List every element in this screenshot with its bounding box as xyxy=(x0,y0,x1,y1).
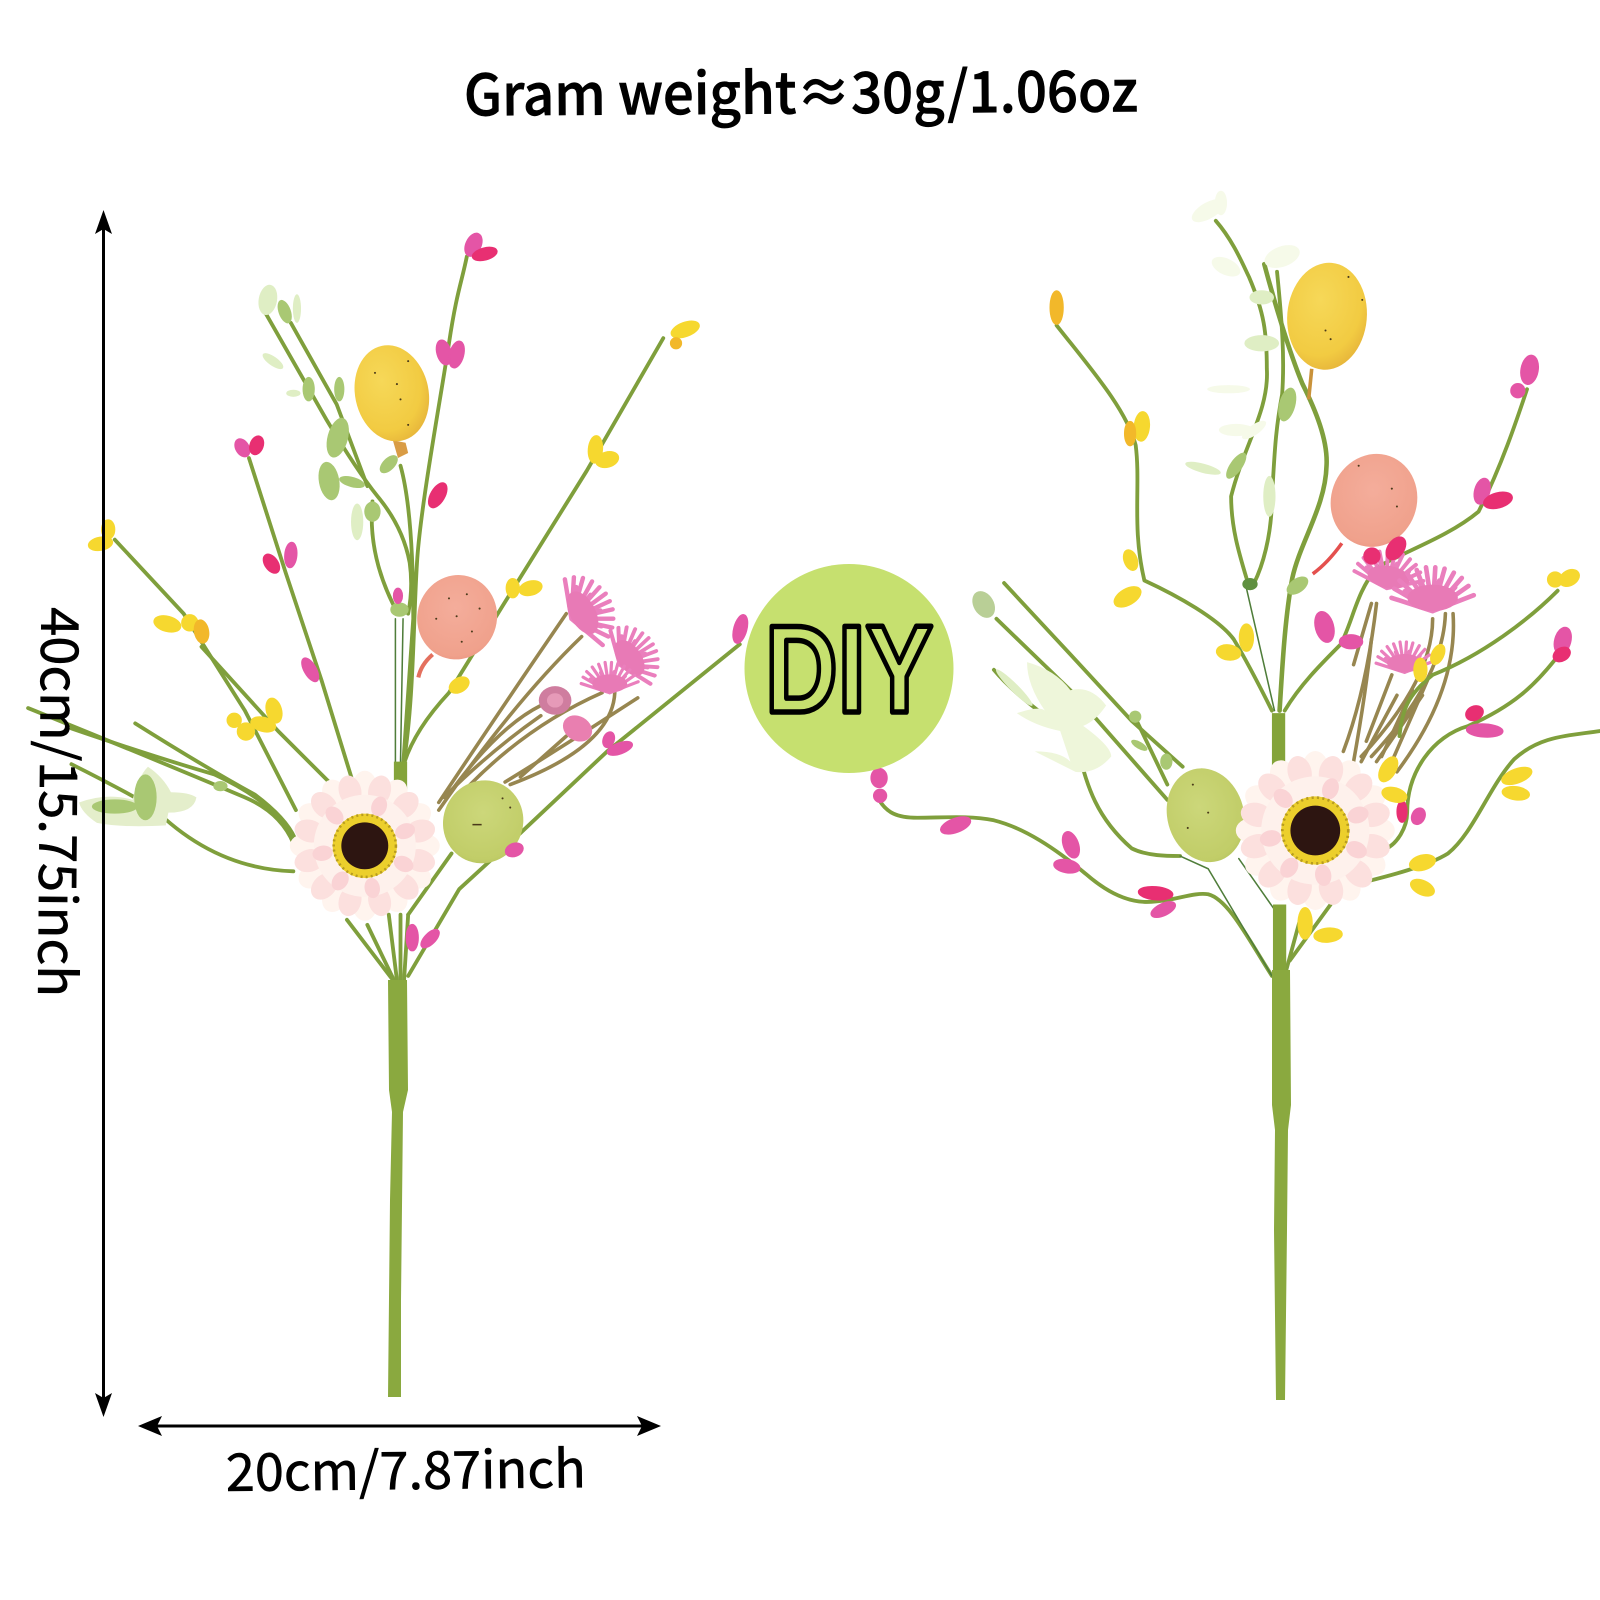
sunflower xyxy=(1236,751,1395,910)
arrow: width dimension xyxy=(138,1416,661,1436)
green stems xyxy=(879,221,1600,976)
yellow berries xyxy=(88,318,701,740)
title: Gram weight≈30g/1.06oz xyxy=(464,46,1138,132)
pink spiky flowers xyxy=(539,565,671,747)
yellow berries xyxy=(1051,291,1582,943)
pink berries xyxy=(871,354,1574,920)
green egg xyxy=(1156,759,1255,871)
width label: 20cm/7.87inch xyxy=(225,1427,586,1506)
arrow: height dimension xyxy=(95,210,112,1417)
plant: left spray xyxy=(28,231,750,980)
yellow egg xyxy=(1283,259,1371,399)
green stems xyxy=(28,257,740,980)
pink berries xyxy=(232,231,750,950)
thin green wires xyxy=(395,619,403,762)
green egg xyxy=(429,767,537,877)
DIY badge xyxy=(744,564,954,773)
thick stem collar xyxy=(388,762,414,792)
salmon egg xyxy=(408,566,507,677)
main stem: left xyxy=(388,980,408,1397)
thin green wires xyxy=(1180,588,1274,976)
yellow egg xyxy=(346,338,438,458)
flower stems xyxy=(439,614,638,810)
pink spiky flowers xyxy=(1352,546,1474,672)
plant: right spray xyxy=(871,191,1600,980)
leaves xyxy=(79,283,409,826)
main stem: right xyxy=(1272,970,1291,1400)
sunflower xyxy=(290,771,440,921)
DIY badge: DIY xyxy=(765,601,933,739)
flower stems xyxy=(1343,603,1453,772)
height label: 40cm/15.75inch xyxy=(23,607,101,998)
salmon egg xyxy=(1313,442,1430,574)
thick stem collar xyxy=(1279,713,1280,980)
leaves xyxy=(968,191,1312,772)
